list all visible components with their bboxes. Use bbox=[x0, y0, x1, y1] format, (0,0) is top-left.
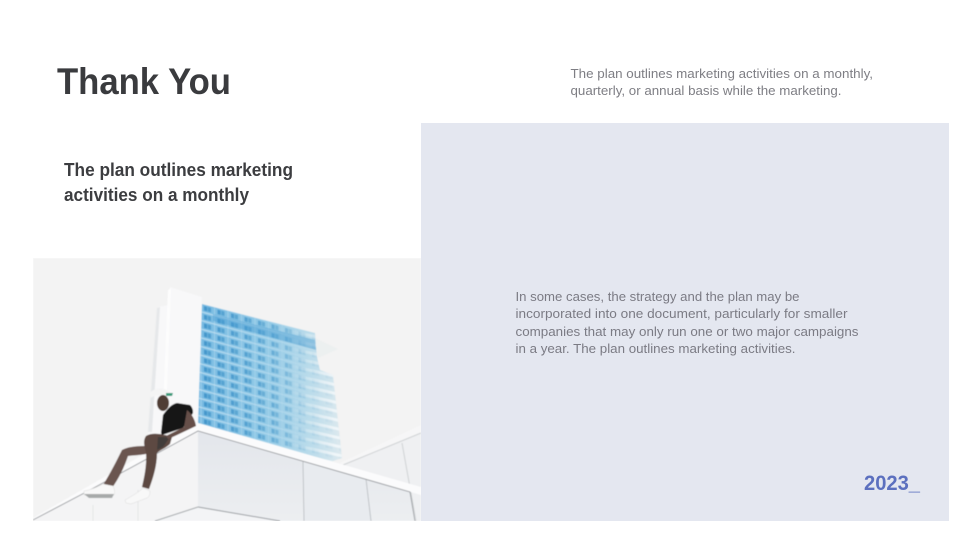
subheading: The plan outlines marketing bbox=[64, 159, 293, 180]
head bbox=[157, 395, 169, 411]
panel: lavender block bbox=[421, 123, 949, 521]
tower white side bbox=[148, 290, 170, 432]
cap bbox=[151, 390, 166, 397]
far leg bbox=[103, 446, 147, 486]
body text: incorporated into one document, particularly for smaller bbox=[516, 306, 848, 321]
slide bbox=[33, 67, 949, 521]
arm bbox=[166, 410, 196, 439]
body text: companies that may only run one or two major campaigns bbox=[516, 324, 859, 339]
body text: In some cases, the strategy and the plan may be bbox=[516, 289, 800, 304]
near leg bbox=[142, 434, 172, 489]
ledge top bbox=[33, 423, 421, 521]
man bbox=[84, 389, 196, 504]
body text bbox=[516, 289, 859, 356]
intro text: The plan outlines marketing activities on a monthly, bbox=[570, 66, 873, 81]
ledge front faces bbox=[154, 432, 382, 521]
subheading bbox=[64, 159, 293, 205]
tower roof detail bbox=[315, 338, 338, 358]
sneakers bbox=[84, 484, 115, 495]
photo: man sitting on a ledge before a tower bbox=[33, 258, 421, 521]
year label: 2023_ bbox=[864, 472, 920, 495]
shorts shadow bbox=[157, 437, 168, 450]
background building right bbox=[344, 432, 421, 521]
title: Thank You bbox=[57, 61, 231, 102]
body text: in a year. The plan outlines marketing activities. bbox=[516, 341, 796, 356]
tower glass facade bbox=[198, 304, 342, 462]
intro text: quarterly, or annual basis while the marketing. bbox=[570, 83, 842, 98]
intro text bbox=[570, 66, 873, 98]
shirt bbox=[161, 403, 193, 435]
subheading: activities on a monthly bbox=[64, 184, 250, 205]
